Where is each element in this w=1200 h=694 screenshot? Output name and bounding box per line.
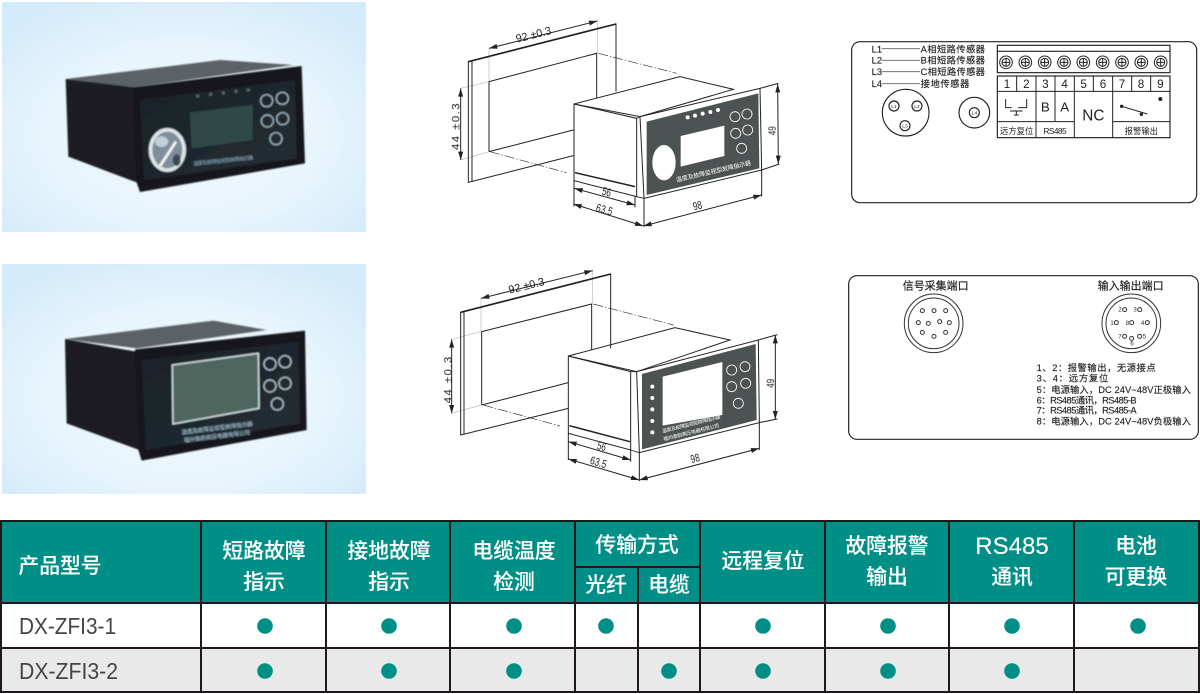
sensor legend: L1 [872, 44, 882, 54]
port notes [1037, 362, 1191, 426]
sensor legend: 接地传感器 [921, 78, 970, 89]
photo: device 1: 温度及故障监视型故障指示器 [193, 154, 253, 167]
table header: 输出 [866, 566, 908, 589]
table header: 接地故障 [347, 540, 431, 563]
dimensions: 44 ±0.3 [443, 357, 455, 403]
terminal table: 远方复位 [1000, 126, 1033, 136]
photo: device 2: 福州泰韵高压电器有限公司 [184, 428, 251, 444]
table header: 光纤 [585, 574, 627, 597]
terminal table: 报警输出 [1125, 126, 1158, 136]
dimensions: 92 ±0.3 [507, 276, 546, 297]
terminal table: 9 [1157, 78, 1164, 91]
dimensions: 49 [767, 126, 779, 135]
dimension drawing: device 2 [443, 270, 777, 481]
table header: 传输方式 [595, 534, 679, 557]
sensor legend: L4 [872, 79, 882, 89]
device outline: 温度及故障监视型故障指示器 [675, 159, 752, 184]
connector L1 L2 L3: L3 [902, 124, 908, 130]
dimensions: 63.5 [594, 202, 614, 219]
port headings [903, 278, 1164, 292]
terminal table: 1 [1004, 78, 1010, 91]
table header: 电池 [1115, 535, 1157, 558]
port notes: 6：RS485通讯，RS485-B [1037, 396, 1137, 406]
table header: 检测 [493, 571, 535, 594]
connector L1 L2 L3 [882, 89, 929, 136]
io connector: 2 [1118, 307, 1122, 314]
port notes: 1、2：报警输出，无源接点 [1037, 362, 1156, 373]
terminal table: A [1060, 100, 1069, 115]
sensor legend [872, 43, 986, 89]
feature table [0, 521, 1200, 692]
terminal table: 2 [1023, 78, 1030, 91]
terminal table: NC [1082, 108, 1104, 125]
dimensions [450, 21, 779, 227]
cut-out plate [461, 20, 616, 182]
terminal table: 4 [1061, 78, 1068, 91]
connector L4: L4 [972, 111, 977, 117]
photo: device 1 [2, 2, 366, 232]
dimensions: 49 [765, 379, 777, 388]
io connector [1102, 294, 1161, 353]
table header: 电缆 [648, 574, 690, 597]
dimensions [443, 271, 777, 481]
row: DX-ZFI3-2 [19, 658, 1020, 684]
table backgrounds [0, 521, 1200, 692]
io connector: 7 [1118, 334, 1122, 341]
io connector: 1 [1110, 320, 1114, 327]
device outline [568, 328, 759, 453]
table header: 通讯 [991, 566, 1033, 589]
connector L1 L2 L3: L1 [891, 104, 897, 110]
terminal screws [997, 45, 1170, 73]
dimensions: 92 ±0.3 [515, 25, 553, 46]
dimension drawing: device 1 [450, 20, 779, 227]
wiring panel [852, 42, 1197, 203]
table header: 故障报警 [845, 535, 929, 558]
dimensions: 44 ±0.3 [450, 103, 462, 150]
table header [18, 533, 1167, 597]
dimensions: 98 [692, 200, 703, 213]
dimensions: 56 [601, 186, 612, 200]
io connector: 8 [1126, 320, 1130, 327]
table header: RS485 [975, 533, 1049, 560]
sensor legend: L3 [872, 67, 882, 77]
row: DX-ZFI3-1: DX-ZFI3-1 [19, 613, 116, 639]
device outline: 温度及故障监视型故障指示器 [661, 414, 721, 435]
signal connector [904, 294, 963, 353]
dimensions: 56 [596, 440, 607, 454]
terminal table: B [1041, 100, 1050, 115]
dimensions: 98 [689, 452, 701, 466]
terminal table: 7 [1119, 78, 1125, 91]
table header: 电缆温度 [472, 540, 556, 563]
port headings: 输入输出端口 [1098, 278, 1164, 292]
device outline [574, 77, 762, 198]
io connector: 6 [1130, 341, 1134, 348]
dimensions: 63.5 [588, 455, 608, 471]
terminal table: 8 [1138, 78, 1144, 91]
table header: 指示 [243, 571, 285, 594]
table header: 可更换 [1105, 566, 1167, 589]
row: DX-ZFI3-1 [19, 613, 1146, 639]
port notes: 5：电源输入，DC 24V~48V正极输入 [1037, 384, 1191, 395]
sensor legend: C相短路传感器 [921, 66, 986, 77]
terminal table: 3 [1042, 78, 1049, 91]
port headings: 信号采集端口 [903, 278, 969, 292]
port notes: 7：RS485通讯，RS485-A [1037, 406, 1137, 416]
sensor legend: L2 [872, 56, 882, 66]
io connector: 5 [1143, 334, 1147, 341]
port panel [849, 276, 1198, 439]
port notes: 8：电源输入，DC 24V~48V负极输入 [1037, 415, 1191, 426]
table header: 产品型号 [18, 555, 102, 578]
device outline: 福州泰韵高压电器有限公司 [663, 422, 720, 443]
connector L1 L2 L3: L2 [914, 104, 920, 110]
table header: 短路故障 [222, 540, 306, 563]
table header: 指示 [368, 571, 410, 594]
terminal table: 6 [1100, 78, 1106, 91]
sensor legend: A相短路传感器 [921, 43, 986, 54]
terminal table: RS485 [1043, 126, 1067, 136]
photo: device 2 [2, 264, 366, 494]
row: DX-ZFI3-2: DX-ZFI3-2 [19, 658, 118, 684]
connector L4 [959, 97, 990, 128]
cut-out plate [452, 270, 611, 435]
port notes: 3、4：远方复位 [1037, 373, 1108, 384]
photo: device 2: 温度及故障监视型故障指示器 [181, 420, 253, 436]
table header: 远程复位 [721, 550, 805, 573]
sensor legend: B相短路传感器 [921, 55, 986, 66]
io connector: 4 [1141, 320, 1145, 327]
terminal table: 5 [1080, 78, 1087, 91]
terminal table [997, 76, 1170, 138]
io connector: 3 [1133, 307, 1137, 314]
